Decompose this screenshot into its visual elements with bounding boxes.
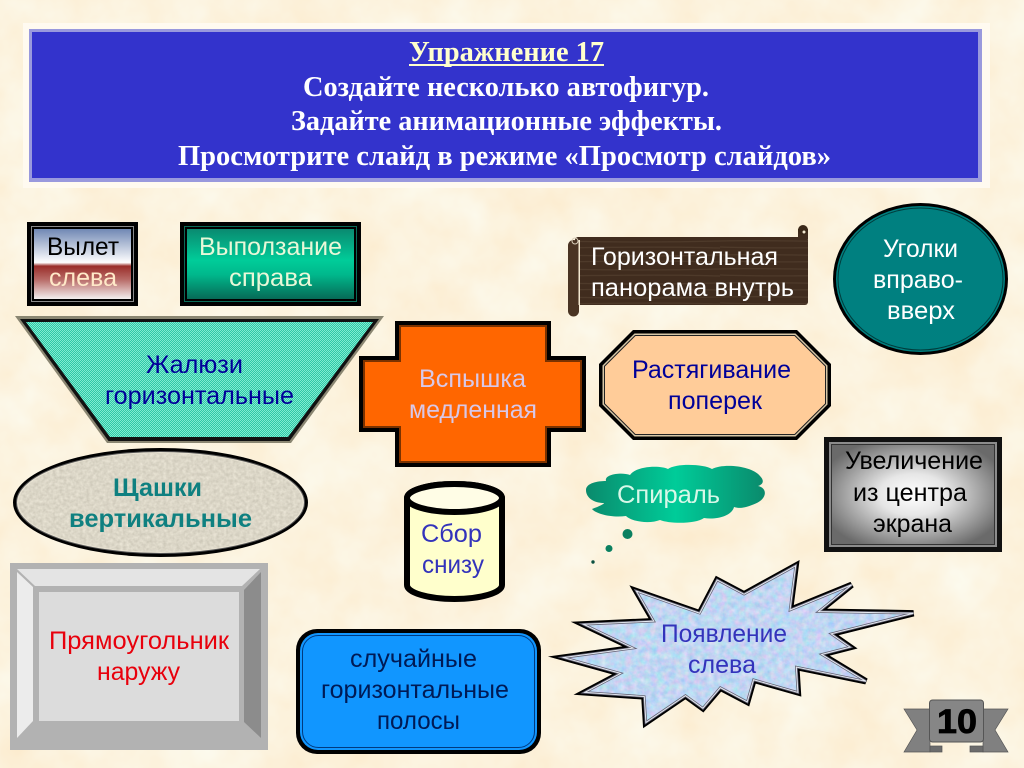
text block: instructions: Задайте анимационные эффекты. [291, 106, 722, 137]
shape: Вылет слева [27, 222, 138, 306]
shape: Уголки вправо-вверх [833, 203, 1008, 355]
shape: Щашки вертикальные [13, 448, 308, 557]
shape: Уголки вправо-вверх: Уголки [883, 235, 958, 263]
text block: instructions: Просмотрите слайд в режиме «Просмотр слайдов» [178, 141, 831, 172]
shape: Увеличение из центра экрана [824, 437, 1002, 552]
shape: случайные горизонтальные полосы: случайные [350, 645, 477, 673]
shape: Уголки вправо-вверх: вправо- [873, 266, 963, 294]
shape: Горизонтальная панорама внутрь: панорама внутрь [591, 274, 794, 302]
text block: instructions [178, 72, 831, 172]
heading: exercise number: Упражнение 17 [409, 37, 604, 68]
panel: exercise title [23, 23, 990, 188]
shape: Сбор снизу: Сбор [421, 520, 482, 548]
shape: Выползание справа [180, 222, 361, 306]
shape: Выползание справа: справа [229, 264, 312, 292]
shape: Щашки вертикальные: Щашки [113, 474, 202, 502]
badge: page number 10: 10 [937, 703, 977, 741]
shape: Выползание справа: Выползание [199, 233, 342, 261]
shape: Спираль thought cloud [586, 465, 765, 564]
shape: Вылет слева: Вылет [47, 233, 120, 261]
shape: Щашки вертикальные: вертикальные [69, 505, 252, 533]
shape: Появление слева: Появление [661, 620, 787, 648]
shape: Сбор снизу: снизу [422, 551, 484, 579]
shape: Растягивание поперек [599, 330, 831, 440]
text block: instructions: Создайте несколько автофигур. [303, 72, 709, 103]
shape: Растягивание поперек: Растягивание [632, 356, 791, 384]
shape: Увеличение из центра экрана: экрана [873, 510, 952, 538]
shape: Прямоугольник наружу [10, 563, 268, 750]
shape: Горизонтальная панорама внутрь [568, 225, 808, 316]
shape: Увеличение из центра экрана: Увеличение [845, 447, 983, 475]
shape: Уголки вправо-вверх: вверх [887, 297, 956, 325]
shape: случайные горизонтальные полосы: полосы [377, 707, 460, 735]
shape: Появление слева: слева [688, 651, 756, 679]
shape: Прямоугольник наружу: наружу [97, 658, 180, 686]
shape: Жалюзи горизонтальные: горизонтальные [105, 382, 294, 410]
shape: Сбор снизу [407, 484, 502, 599]
shape: Жалюзи горизонтальные [15, 316, 384, 443]
shape: Увеличение из центра экрана: из центра [853, 479, 967, 507]
shape: Растягивание поперек: поперек [668, 387, 763, 415]
shape: Спираль thought cloud: Спираль [617, 481, 720, 509]
shape: Горизонтальная панорама внутрь: Горизонтальная [591, 243, 778, 271]
shape: случайные горизонтальные полосы: горизонтальные [321, 676, 509, 704]
shape: Прямоугольник наружу: Прямоугольник [49, 627, 230, 655]
shape: случайные горизонтальные полосы [296, 629, 541, 754]
badge: page number 10 [904, 700, 1008, 752]
shape: Вспышка медленная: Вспышка [419, 365, 526, 393]
shape: Жалюзи горизонтальные: Жалюзи [146, 351, 243, 379]
shape: Вспышка медленная [359, 321, 586, 467]
shape: Вспышка медленная: медленная [409, 396, 537, 424]
shape: Появление слева [564, 566, 913, 722]
shape: Вылет слева: слева [49, 264, 117, 292]
